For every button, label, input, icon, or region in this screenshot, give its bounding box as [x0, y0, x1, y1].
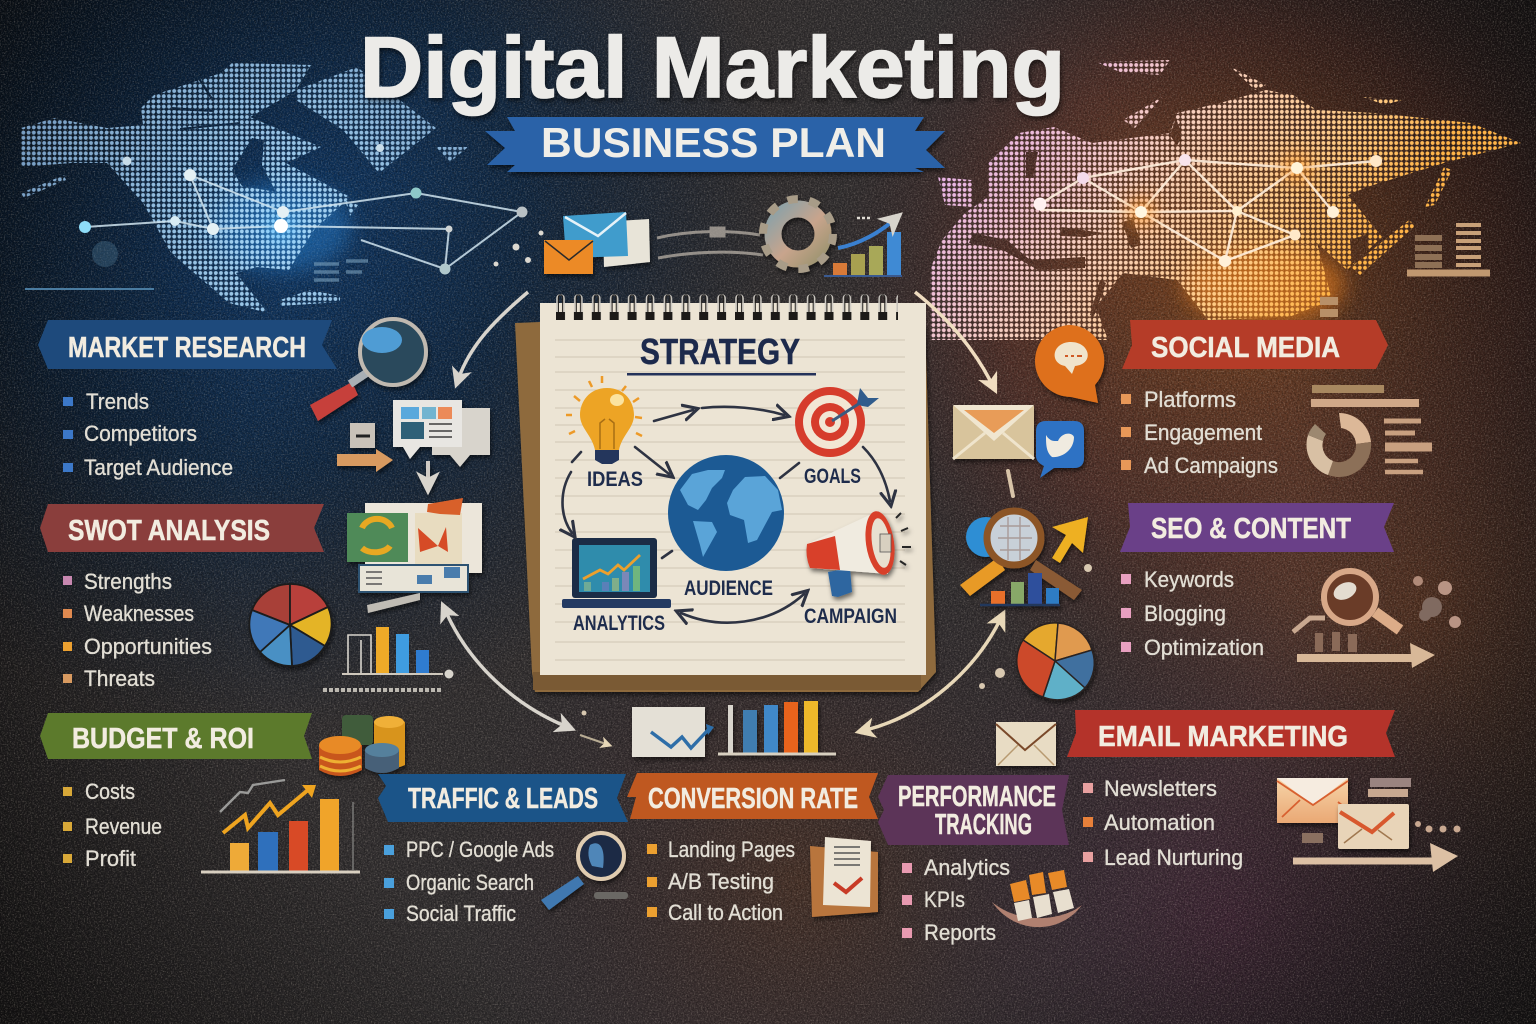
notebook flow arrows: [562, 407, 890, 623]
icon: pie chart left: [249, 584, 332, 666]
list: Profit: [85, 846, 137, 871]
world map: Eurasia: [930, 60, 1521, 340]
list: Call to Action: [668, 900, 783, 925]
list: [63, 779, 162, 871]
icon: envelope cream: [953, 405, 1034, 459]
icon: seo magnifier cluster: [960, 511, 1088, 605]
list: Landing Pages: [668, 837, 795, 862]
icon: budget bar chart: [201, 780, 360, 872]
ribbon: [40, 504, 324, 552]
list: Trends: [86, 389, 149, 414]
icon: checklist document: [810, 837, 878, 917]
label: campaign: CAMPAIGN: [804, 605, 897, 628]
icon: small envelope: [996, 722, 1056, 766]
list: Threats: [84, 666, 155, 691]
icon: bars swot: [323, 627, 454, 690]
connectors between top icons: [657, 228, 763, 258]
icon: twitter bubble: [1036, 421, 1084, 478]
strategy underline: [627, 373, 816, 376]
list: Analytics: [924, 855, 1010, 880]
list: [384, 837, 554, 926]
panel: seo and content: [1120, 503, 1394, 660]
arrows around the notebook: [446, 292, 1000, 744]
list: Automation: [1104, 810, 1215, 835]
connector dash: [1008, 471, 1013, 496]
title: Digital Marketing: [360, 20, 1065, 116]
list: [902, 855, 1010, 945]
label: ideas: IDEAS: [587, 468, 643, 491]
list: Opportunities: [84, 634, 212, 659]
top icons: envelopes: [544, 212, 650, 274]
list: [63, 569, 212, 691]
list: Organic Search: [406, 870, 534, 895]
icon: traffic magnifier: [541, 833, 624, 910]
ribbon: [40, 713, 312, 759]
gear: [763, 199, 833, 269]
notebook: [515, 294, 936, 692]
heading: EMAIL MARKETING: [1098, 721, 1348, 753]
ribbon: [378, 774, 628, 822]
icon: swot documents: [347, 498, 482, 613]
list: Blogging: [1144, 601, 1226, 626]
list: Competitors: [84, 421, 197, 446]
label: analytics: ANALYTICS: [573, 612, 665, 635]
top icons: gear and bars: [763, 199, 902, 276]
panel: email marketing: [1067, 710, 1395, 870]
list: [647, 837, 795, 925]
list: Costs: [85, 779, 135, 804]
icon: megaphone: [806, 509, 911, 597]
small sparkles: [494, 230, 544, 266]
bars and arrow: [824, 218, 902, 276]
icon: bottom line chart card: [632, 707, 714, 757]
list: KPIs: [924, 887, 965, 912]
subtitle banner: BUSINESS PLAN: [541, 119, 886, 166]
ribbon: [878, 775, 1069, 845]
heading: SWOT ANALYSIS: [68, 515, 270, 547]
world map: Americas: [21, 63, 528, 313]
list: Lead Nurturing: [1104, 845, 1243, 870]
list: Social Traffic: [406, 901, 516, 926]
heading: BUDGET & ROI: [72, 723, 254, 755]
heading: CONVERSION RATE: [648, 783, 858, 815]
list: Reports: [924, 920, 996, 945]
heading: PERFORMANCE: [898, 781, 1056, 813]
ribbon: [38, 320, 337, 369]
list: Optimization: [1144, 635, 1264, 660]
panel: conversion rate: [627, 773, 878, 925]
icon: performance bars: [992, 870, 1082, 927]
list: PPC / Google Ads: [406, 837, 554, 862]
list: [1083, 776, 1243, 870]
label: goals: GOALS: [804, 465, 861, 488]
icon: small dots: [582, 564, 1092, 716]
icon: pie chart right: [1017, 623, 1094, 700]
heading: TRACKING: [935, 809, 1032, 841]
label: audience: AUDIENCE: [684, 577, 773, 600]
heading: SOCIAL MEDIA: [1151, 332, 1340, 364]
list: [63, 389, 233, 480]
icon: globe: [668, 455, 784, 571]
list: Engagement: [1144, 420, 1263, 445]
panel: swot analysis: [40, 504, 324, 691]
icon: social bars and donut: [1306, 389, 1432, 477]
notebook spiral: [556, 294, 898, 324]
list: [1121, 567, 1264, 660]
heading: MARKET RESEARCH: [68, 332, 306, 364]
icon: bottom bar chart: [718, 701, 836, 754]
list: Strengths: [84, 569, 172, 594]
list: Platforms: [1144, 387, 1236, 412]
list: Ad Campaigns: [1144, 453, 1278, 478]
panel: market research: [38, 320, 337, 480]
panel: social media: [1121, 320, 1388, 478]
icon: research cards: [337, 400, 490, 485]
notebook page: [540, 303, 926, 675]
ribbon: [627, 773, 878, 819]
icon: orange speech bubble: [1035, 325, 1104, 403]
list: A/B Testing: [668, 869, 774, 894]
icon: coins: [319, 715, 405, 776]
icon: email envelopes and arrow: [1277, 778, 1460, 872]
panel: performance tracking: [878, 775, 1069, 945]
icon: magnifier: [310, 319, 426, 421]
icon: seo search and arrow: [1293, 571, 1461, 668]
heading: [898, 781, 1056, 841]
icon: target: [795, 387, 879, 457]
list: Weaknesses: [84, 601, 194, 626]
list: [1121, 387, 1278, 478]
ribbon: [1122, 320, 1388, 369]
icon: laptop with chart: [562, 538, 671, 608]
list: Keywords: [1144, 567, 1234, 592]
panel: traffic and leads: [378, 774, 628, 926]
list: Target Audience: [84, 455, 233, 480]
icon: small grey bar: [594, 892, 628, 899]
list: Revenue: [85, 814, 162, 839]
ribbon: [1120, 503, 1394, 552]
panel: budget and roi: [40, 713, 312, 871]
heading: TRAFFIC & LEADS: [408, 783, 598, 815]
strategy heading: STRATEGY: [640, 331, 800, 372]
list: Newsletters: [1104, 776, 1217, 801]
subtitle banner: [485, 117, 945, 172]
heading: SEO & CONTENT: [1151, 513, 1351, 545]
ribbon: [1067, 710, 1395, 757]
icon: lightbulb: [566, 376, 642, 464]
